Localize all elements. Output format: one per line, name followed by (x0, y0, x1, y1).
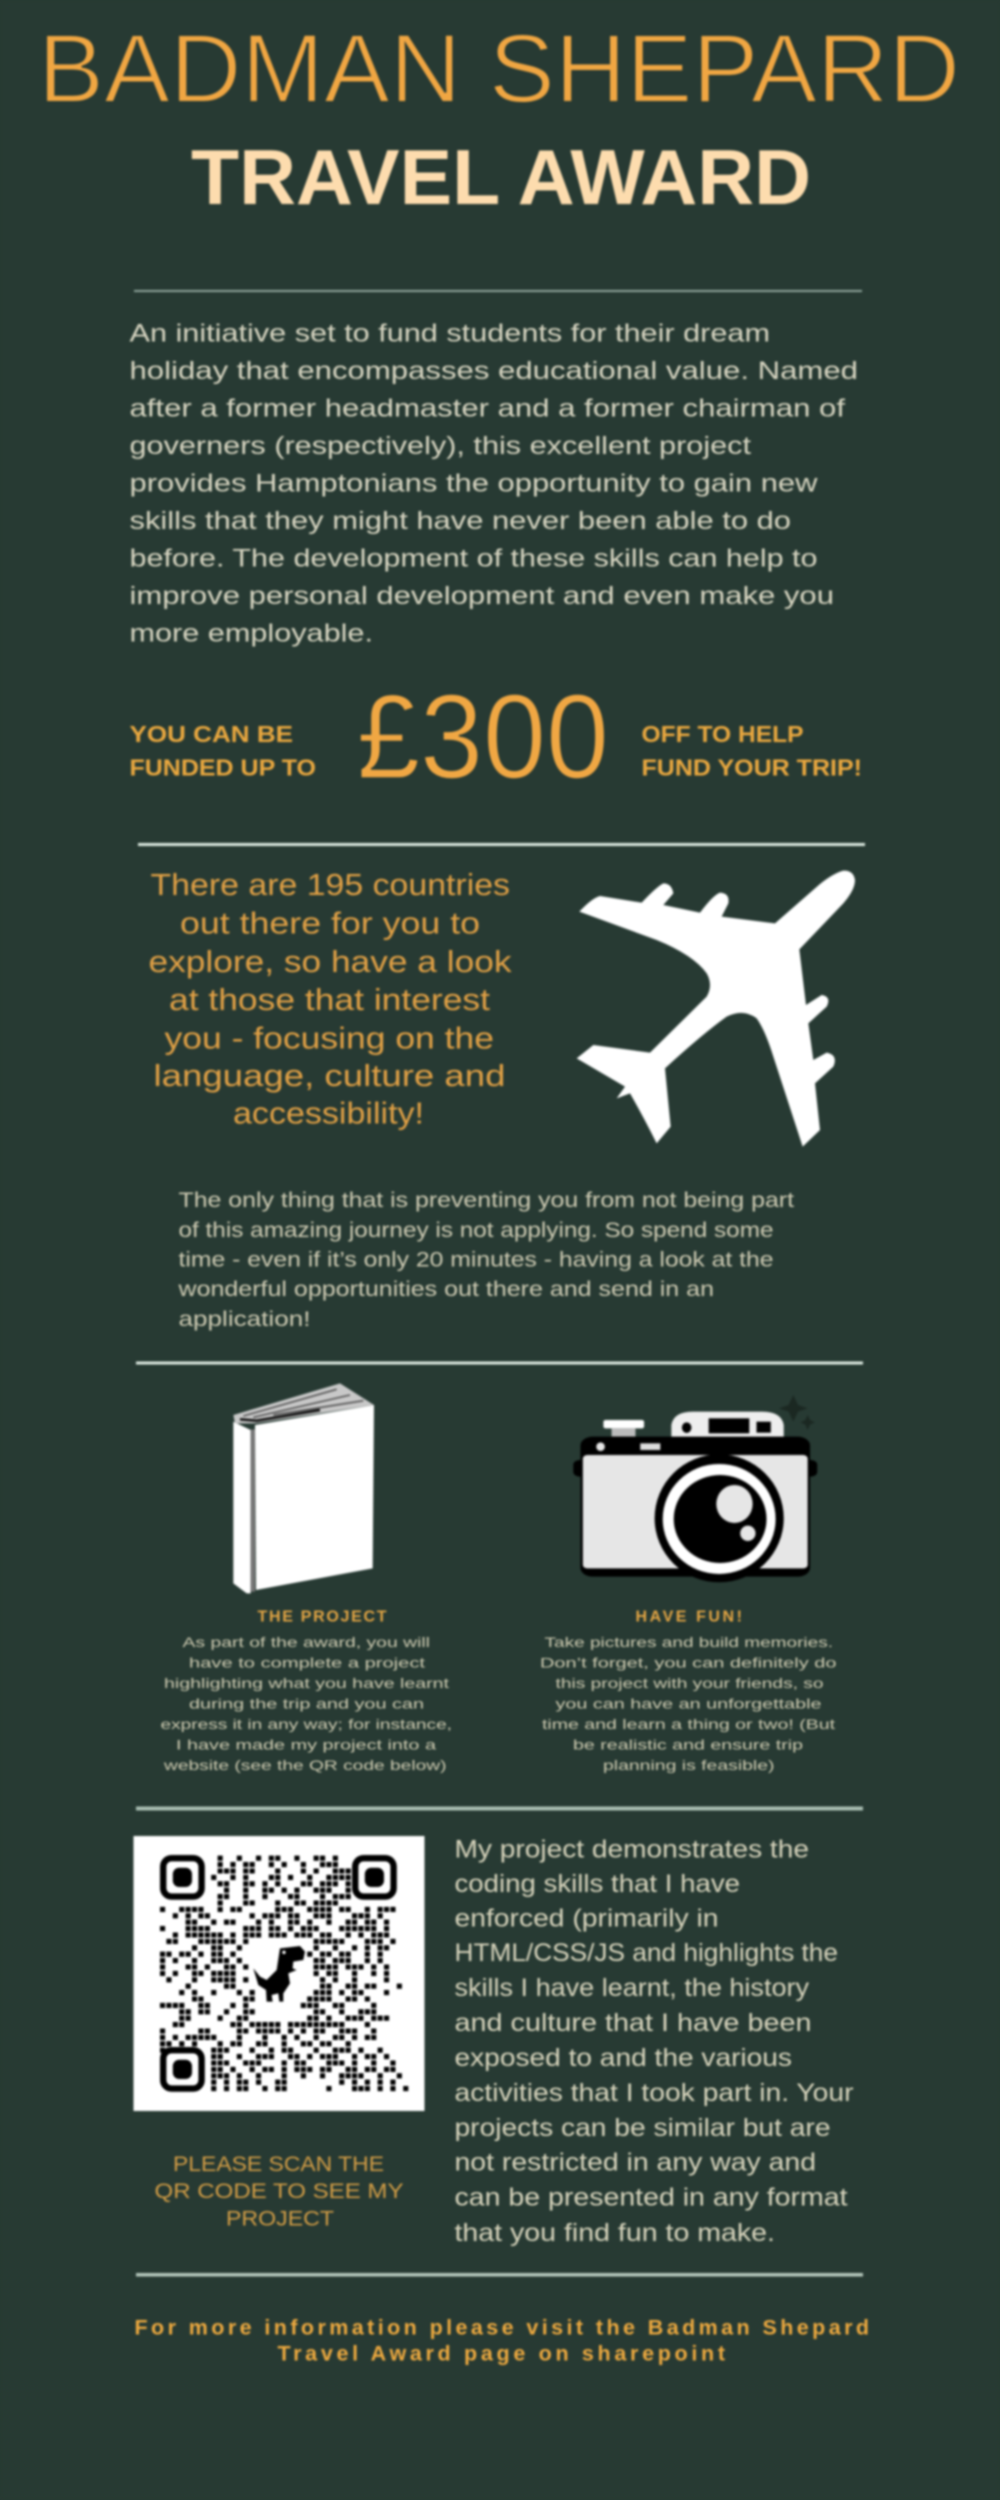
text block: introduction: before. The development of these skills can help to (130, 544, 818, 572)
text block: apply encouragement: application! (178, 1308, 310, 1331)
text block: my project: that you find fun to make. (454, 2219, 775, 2247)
footer: more information: For more information please visit the Badman Shepard (134, 2316, 869, 2340)
text block: introduction: improve personal development and even make you (130, 582, 834, 610)
text block: my project: HTML/CSS/JS and highlights the (454, 1939, 838, 1967)
text block: introduction: more employable. (130, 620, 373, 648)
body: this project with your friends, so (556, 1675, 824, 1691)
body: website (see the QR code below) (163, 1757, 446, 1773)
text block: my project: skills I have learnt, the history (454, 1974, 810, 2002)
body: be realistic and ensure trip (573, 1736, 803, 1752)
heading: THE PROJECT (258, 1608, 387, 1626)
panel: the project (160, 1608, 452, 1773)
footer: more information: Travel Award page on sharepoint (278, 2342, 725, 2366)
body: express it in any way; for instance, (160, 1716, 452, 1732)
body: you can have an unforgettable (556, 1696, 822, 1712)
text block: 195 countries: accessibility! (233, 1096, 424, 1130)
text block: introduction: governers (respectively), this excellent project (130, 432, 751, 460)
icon: book (233, 1383, 374, 1593)
title: BADMAN SHEPARD (38, 14, 960, 123)
text block: apply encouragement: The only thing that is preventing you from not being part (178, 1189, 794, 1212)
icon: plane (577, 871, 855, 1147)
text block: my project: can be presented in any format (454, 2184, 848, 2212)
body (540, 1634, 837, 1773)
caption: scan QR code: QR CODE TO SEE MY (154, 2180, 404, 2203)
text block: 195 countries: at those that interest (169, 982, 490, 1017)
panel: have fun (540, 1608, 837, 1773)
text block: my project: enforced (primarily in (454, 1904, 718, 1932)
text block: 195 countries: explore, so have a look (148, 944, 512, 979)
text block: my project (454, 1836, 854, 2247)
text block: my project: My project demonstrates the (454, 1836, 809, 1864)
text block: my project: and culture that I have been (454, 2009, 812, 2037)
text block: 195 countries: There are 195 countries (150, 867, 510, 902)
callout: funding amount (130, 670, 862, 804)
text block: my project: not restricted in any way and (454, 2148, 816, 2176)
text block: introduction (130, 320, 858, 648)
heading: HAVE FUN! (636, 1608, 742, 1626)
subtitle: TRAVEL AWARD (191, 133, 811, 221)
text block: my project: projects can be similar but are (454, 2114, 830, 2142)
text block: 195 countries: you - focusing on the (164, 1020, 494, 1056)
text block: introduction: provides Hamptonians the opportunity to gain new (130, 470, 819, 498)
body: Take pictures and build memories. (544, 1634, 833, 1650)
text block: my project: exposed to and the various (454, 2044, 792, 2072)
icon: dinosaur (253, 1946, 305, 2002)
body: Don’t forget, you can definitely do (540, 1654, 837, 1670)
body: time and learn a thing or two! (But (542, 1716, 835, 1732)
icon: camera (573, 1395, 817, 1582)
body: highlighting what you have learnt (164, 1675, 449, 1691)
amount: £300 (357, 670, 609, 804)
text block: introduction: holiday that encompasses educational value. Named (130, 357, 858, 385)
body: during the trip and you can (189, 1696, 424, 1712)
caption: scan QR code (154, 2153, 404, 2230)
caption: scan QR code: PLEASE SCAN THE (173, 2153, 384, 2176)
text block: 195 countries: out there for you to (180, 906, 480, 940)
text block: 195 countries (148, 867, 512, 1130)
text block: apply encouragement: wonderful opportunities out there and send in an (177, 1278, 714, 1301)
text block: apply encouragement: of this amazing journey is not applying. So spend some (178, 1219, 774, 1242)
text block: my project: activities that I took part in. Your (454, 2079, 854, 2107)
callout: funding amount: OFF TO HELP (642, 721, 804, 747)
footer: more information (134, 2316, 869, 2366)
text block: apply encouragement: time - even if it’s only 20 minutes - having a look at the (178, 1248, 774, 1272)
title (38, 14, 960, 221)
text block: introduction: skills that they might have never been able to do (130, 507, 791, 535)
caption: scan QR code: PROJECT (226, 2208, 334, 2230)
text block: 195 countries: language, culture and (154, 1058, 506, 1093)
text block: introduction: An initiative set to fund students for their dream (130, 320, 770, 348)
text block: my project: coding skills that I have (454, 1870, 740, 1898)
body: I have made my project into a (176, 1736, 436, 1752)
body: have to complete a project (189, 1654, 425, 1670)
body (160, 1634, 452, 1773)
callout: funding amount: FUND YOUR TRIP! (642, 754, 862, 780)
callout: funding amount: YOU CAN BE (130, 721, 293, 747)
text block: apply encouragement (177, 1189, 794, 1331)
text block: introduction: after a former headmaster and a former chairman of (130, 394, 845, 422)
callout: funding amount: FUNDED UP TO (130, 754, 316, 780)
body: As part of the award, you will (182, 1634, 430, 1650)
QR code (134, 1836, 424, 2111)
body: planning is feasible) (603, 1757, 774, 1773)
